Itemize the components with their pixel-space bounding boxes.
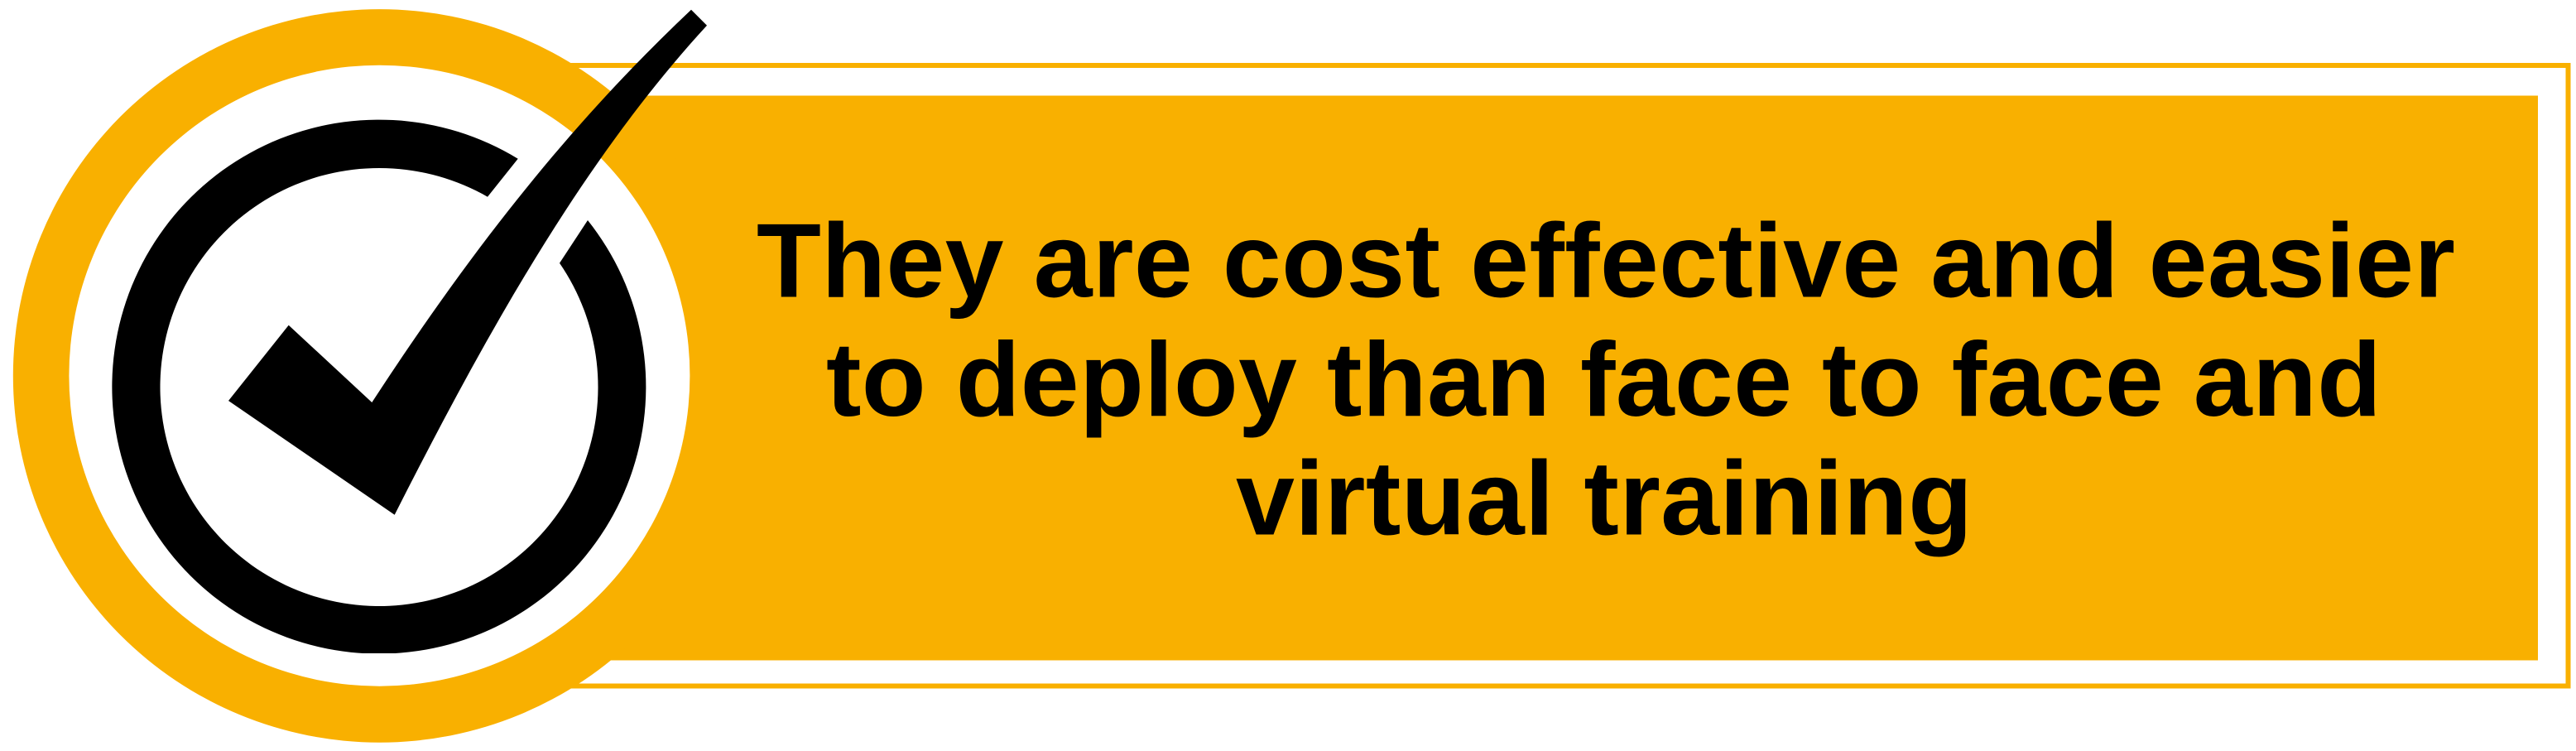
line 3: virtual training (1236, 440, 1973, 557)
badge inner white disc (69, 65, 690, 686)
line 2: to deploy than face to face and (826, 321, 2381, 439)
black open ring (112, 120, 646, 654)
icon: yellow circular badge (13, 9, 746, 743)
line 1: They are cost effective and easier (757, 203, 2455, 320)
panel: filled yellow banner (497, 96, 2538, 661)
panel: outlined frame (499, 65, 2568, 686)
heading text (757, 203, 2455, 557)
icon: black check mark in ring (112, 10, 707, 654)
check mark (228, 10, 707, 515)
badge outer yellow disc (13, 9, 746, 743)
